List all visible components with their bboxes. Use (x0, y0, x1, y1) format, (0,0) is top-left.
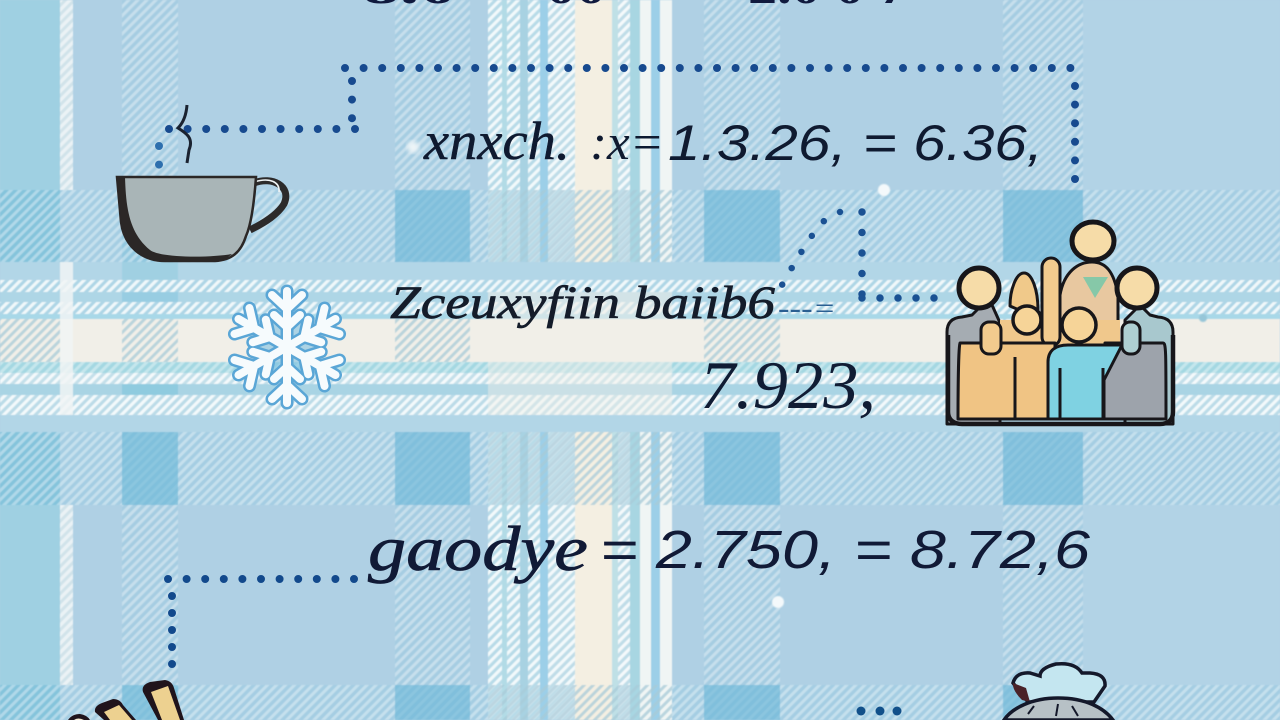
text line 2: ---= (778, 292, 836, 325)
text line 1: xnxch. (423, 111, 570, 171)
text line 3 (368, 514, 1091, 584)
icon: fries / breadsticks (68, 680, 184, 720)
icon: snowflake (231, 291, 343, 403)
text line 3: = 2.750, = 8.72,6 (600, 520, 1091, 580)
dotted connector: bottom right (856, 706, 902, 716)
icon: coffee cup (117, 105, 286, 261)
text number 7.923: 7.923, (700, 347, 876, 423)
dotted connector: cup to top right (159, 68, 1076, 186)
dotted connector: lower left (168, 579, 355, 665)
white sparkle dots (407, 141, 1207, 608)
icon: group of people (947, 222, 1173, 424)
clipped top text (362, 0, 908, 13)
text line 3: gaodye (368, 514, 588, 584)
icon: chef (1004, 664, 1113, 720)
text line 2: Zceuxyfiin baiib6 (390, 277, 776, 329)
text line 1 (423, 111, 1043, 171)
text line 1: :x= (590, 114, 664, 170)
dotted connector: middle text to people icon (782, 212, 935, 300)
text line 1: 1.3.26, = 6.36, (668, 115, 1043, 171)
